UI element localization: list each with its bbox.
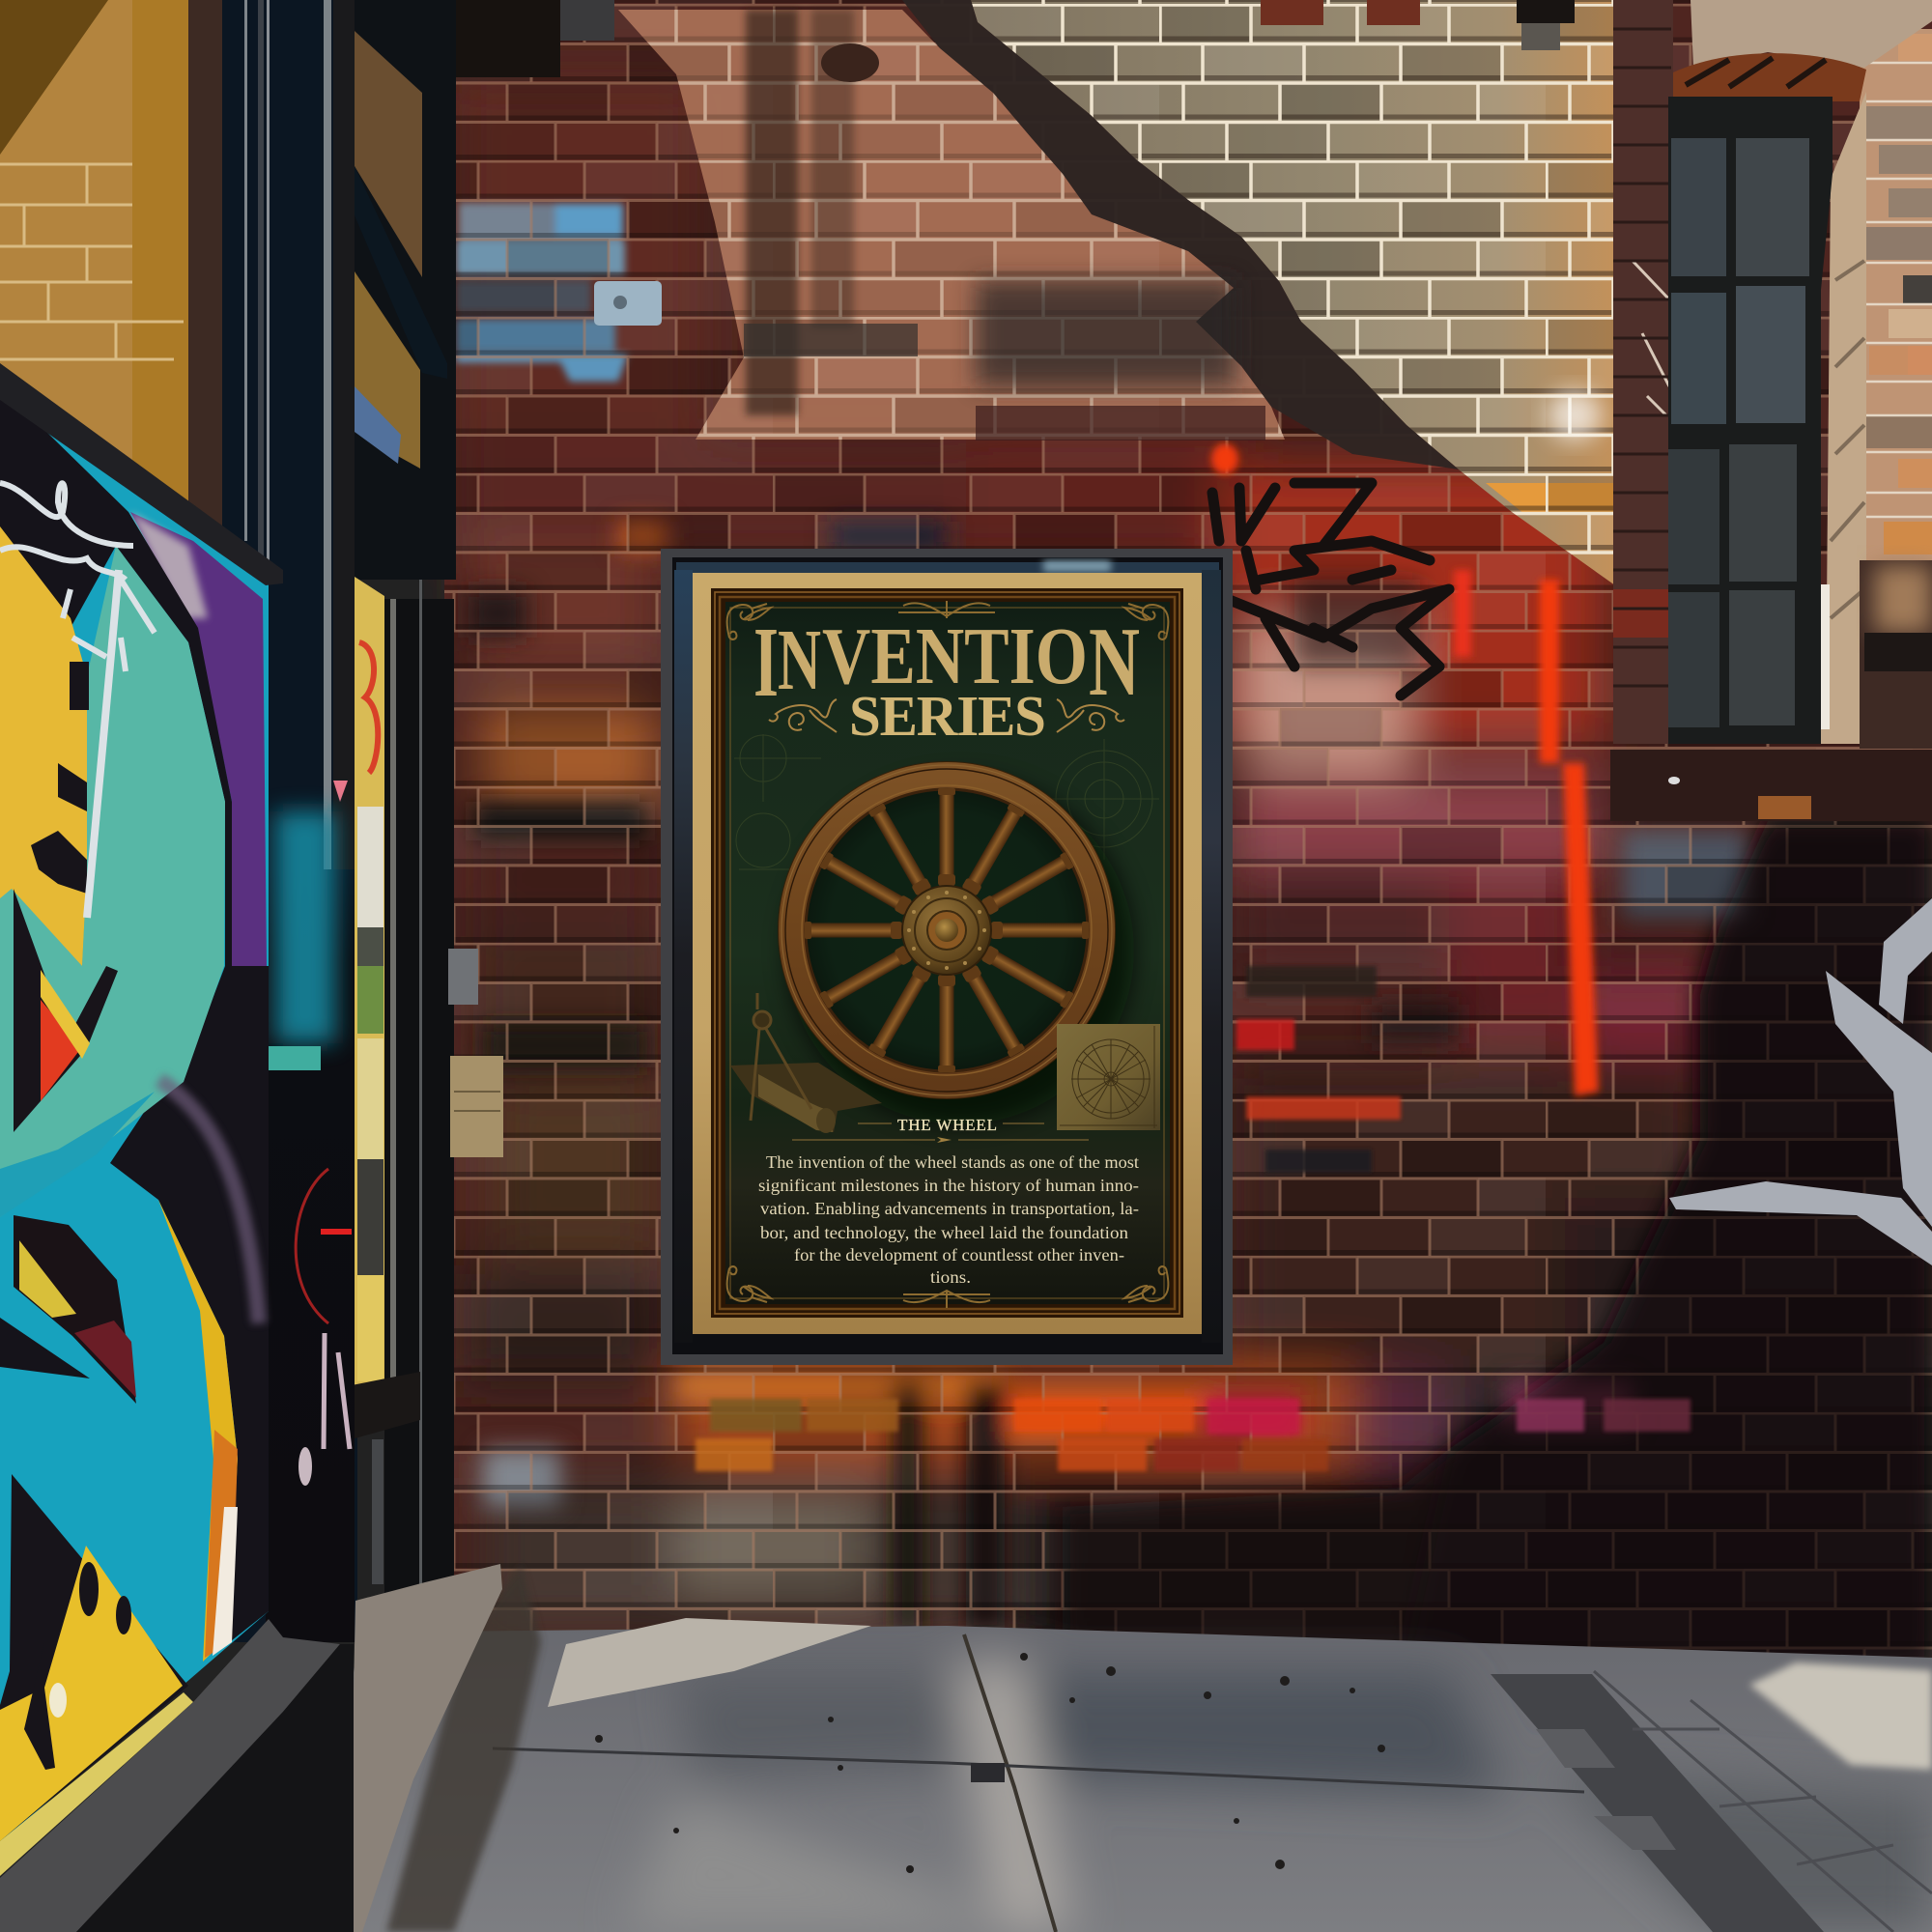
stone arch [1673, 0, 1932, 101]
subtitle: the wheel [792, 1116, 1089, 1143]
description text: The invention of the wheel stands as one of the most [766, 1152, 1139, 1172]
description text [758, 1152, 1139, 1287]
black leaf eye [14, 1215, 136, 1404]
graffiti panel [0, 363, 354, 1932]
sidewalk seams [493, 1634, 1584, 1932]
subtitle: the wheel: THE WHEEL [897, 1116, 997, 1134]
black zigzags [31, 662, 89, 894]
blueprint scroll [730, 1063, 882, 1133]
wall junction box [594, 281, 662, 326]
sidewalk [328, 1565, 1932, 1932]
left flourish [769, 699, 837, 732]
half-lit brick area [618, 10, 1285, 440]
teal body [0, 546, 225, 1217]
teal lower band [0, 1092, 155, 1217]
description text: significant milestones in the history of human inno- [758, 1176, 1139, 1195]
title: N [778, 612, 821, 708]
door yellow panel with posters [355, 577, 384, 1385]
compass [751, 993, 811, 1121]
description text: for the development of countlesst other inven- [794, 1245, 1124, 1264]
top brackets [556, 0, 1575, 50]
title: VENTIO [822, 611, 1088, 701]
black wedge [0, 1318, 90, 1378]
grey ledge [0, 1619, 340, 1932]
red triangle emblem [14, 889, 118, 1132]
right brick wall [1860, 29, 1932, 570]
bottom centre ornament [903, 1291, 990, 1308]
painted blue graffiti patch [456, 203, 628, 382]
yellow lower shape with black drips [0, 1474, 188, 1841]
description text: vation. Enabling advancements in transportation, la- [760, 1199, 1139, 1218]
bright orange and red bricks [696, 966, 1690, 1471]
faint blueprint sketches [734, 734, 1159, 869]
poster frame [661, 549, 1233, 1365]
description text: tions. [930, 1267, 971, 1287]
green panel [725, 602, 1170, 1304]
tan brick window [0, 0, 188, 522]
description text: bor, and technology, the wheel laid the foundation [760, 1223, 1128, 1242]
lower right dark ledge [1860, 560, 1932, 749]
inner thin rule [730, 608, 1164, 1298]
purple sheen [159, 1080, 259, 1323]
dark spray-painted mass [1401, 821, 1932, 1671]
black outer ring shape [0, 386, 269, 1652]
leaf litter near curb [386, 1565, 541, 1932]
door upper glass [355, 0, 456, 580]
window reveal [1816, 92, 1866, 744]
pink marker [333, 781, 348, 802]
black tag graffiti [1212, 483, 1449, 696]
small wheel schematic [1057, 1024, 1160, 1130]
sunlit pavement patches [548, 1618, 1932, 1770]
door frame and step recess [352, 580, 454, 1623]
right building window section [1610, 0, 1932, 821]
top-left dark corner [449, 0, 560, 77]
dark ornamental border [711, 588, 1183, 1318]
top white fade on purple [130, 512, 208, 618]
brick wall [444, 0, 1932, 1671]
top centre ornament [898, 601, 995, 618]
subtitle: SERIES [849, 684, 1046, 748]
title: N [1089, 608, 1140, 717]
window sill [1610, 750, 1932, 821]
paper border [693, 573, 1202, 1334]
window glass [1668, 97, 1833, 744]
wheel illustration [778, 761, 1134, 1124]
brick pier [1613, 0, 1673, 744]
ledge dark front [76, 1644, 354, 1932]
white graffiti lettering [1669, 898, 1932, 1265]
concrete curb step [331, 1564, 502, 1932]
debris along wall [595, 1653, 1385, 1873]
brick pier [188, 0, 222, 541]
paver grid [1594, 1671, 1932, 1932]
navy frame column [222, 0, 357, 1642]
corner ornaments [727, 604, 1168, 1302]
yellow upper left shape [0, 526, 87, 966]
panel base [0, 386, 269, 1843]
diagonal shadow band [902, 0, 1459, 469]
utility boxes [448, 949, 503, 1157]
yellow crescent [158, 1200, 238, 1662]
red spray streaks [1211, 443, 1599, 1096]
dark pillar [212, 811, 355, 1642]
pale yellow bottom strip [0, 1692, 193, 1876]
crescent glow [205, 1430, 238, 1658]
sunlit brick area [971, 0, 1615, 585]
poster [693, 573, 1202, 1334]
white highlight [213, 1507, 238, 1656]
title: I [753, 607, 779, 718]
purple region [130, 512, 267, 966]
dark paver strip [1491, 1674, 1824, 1932]
left building [0, 0, 503, 1932]
right flourish [1057, 699, 1124, 732]
white scribbles [0, 483, 155, 918]
panel top cap [0, 363, 283, 585]
dark overlay subduing mortar [1063, 821, 1932, 1671]
